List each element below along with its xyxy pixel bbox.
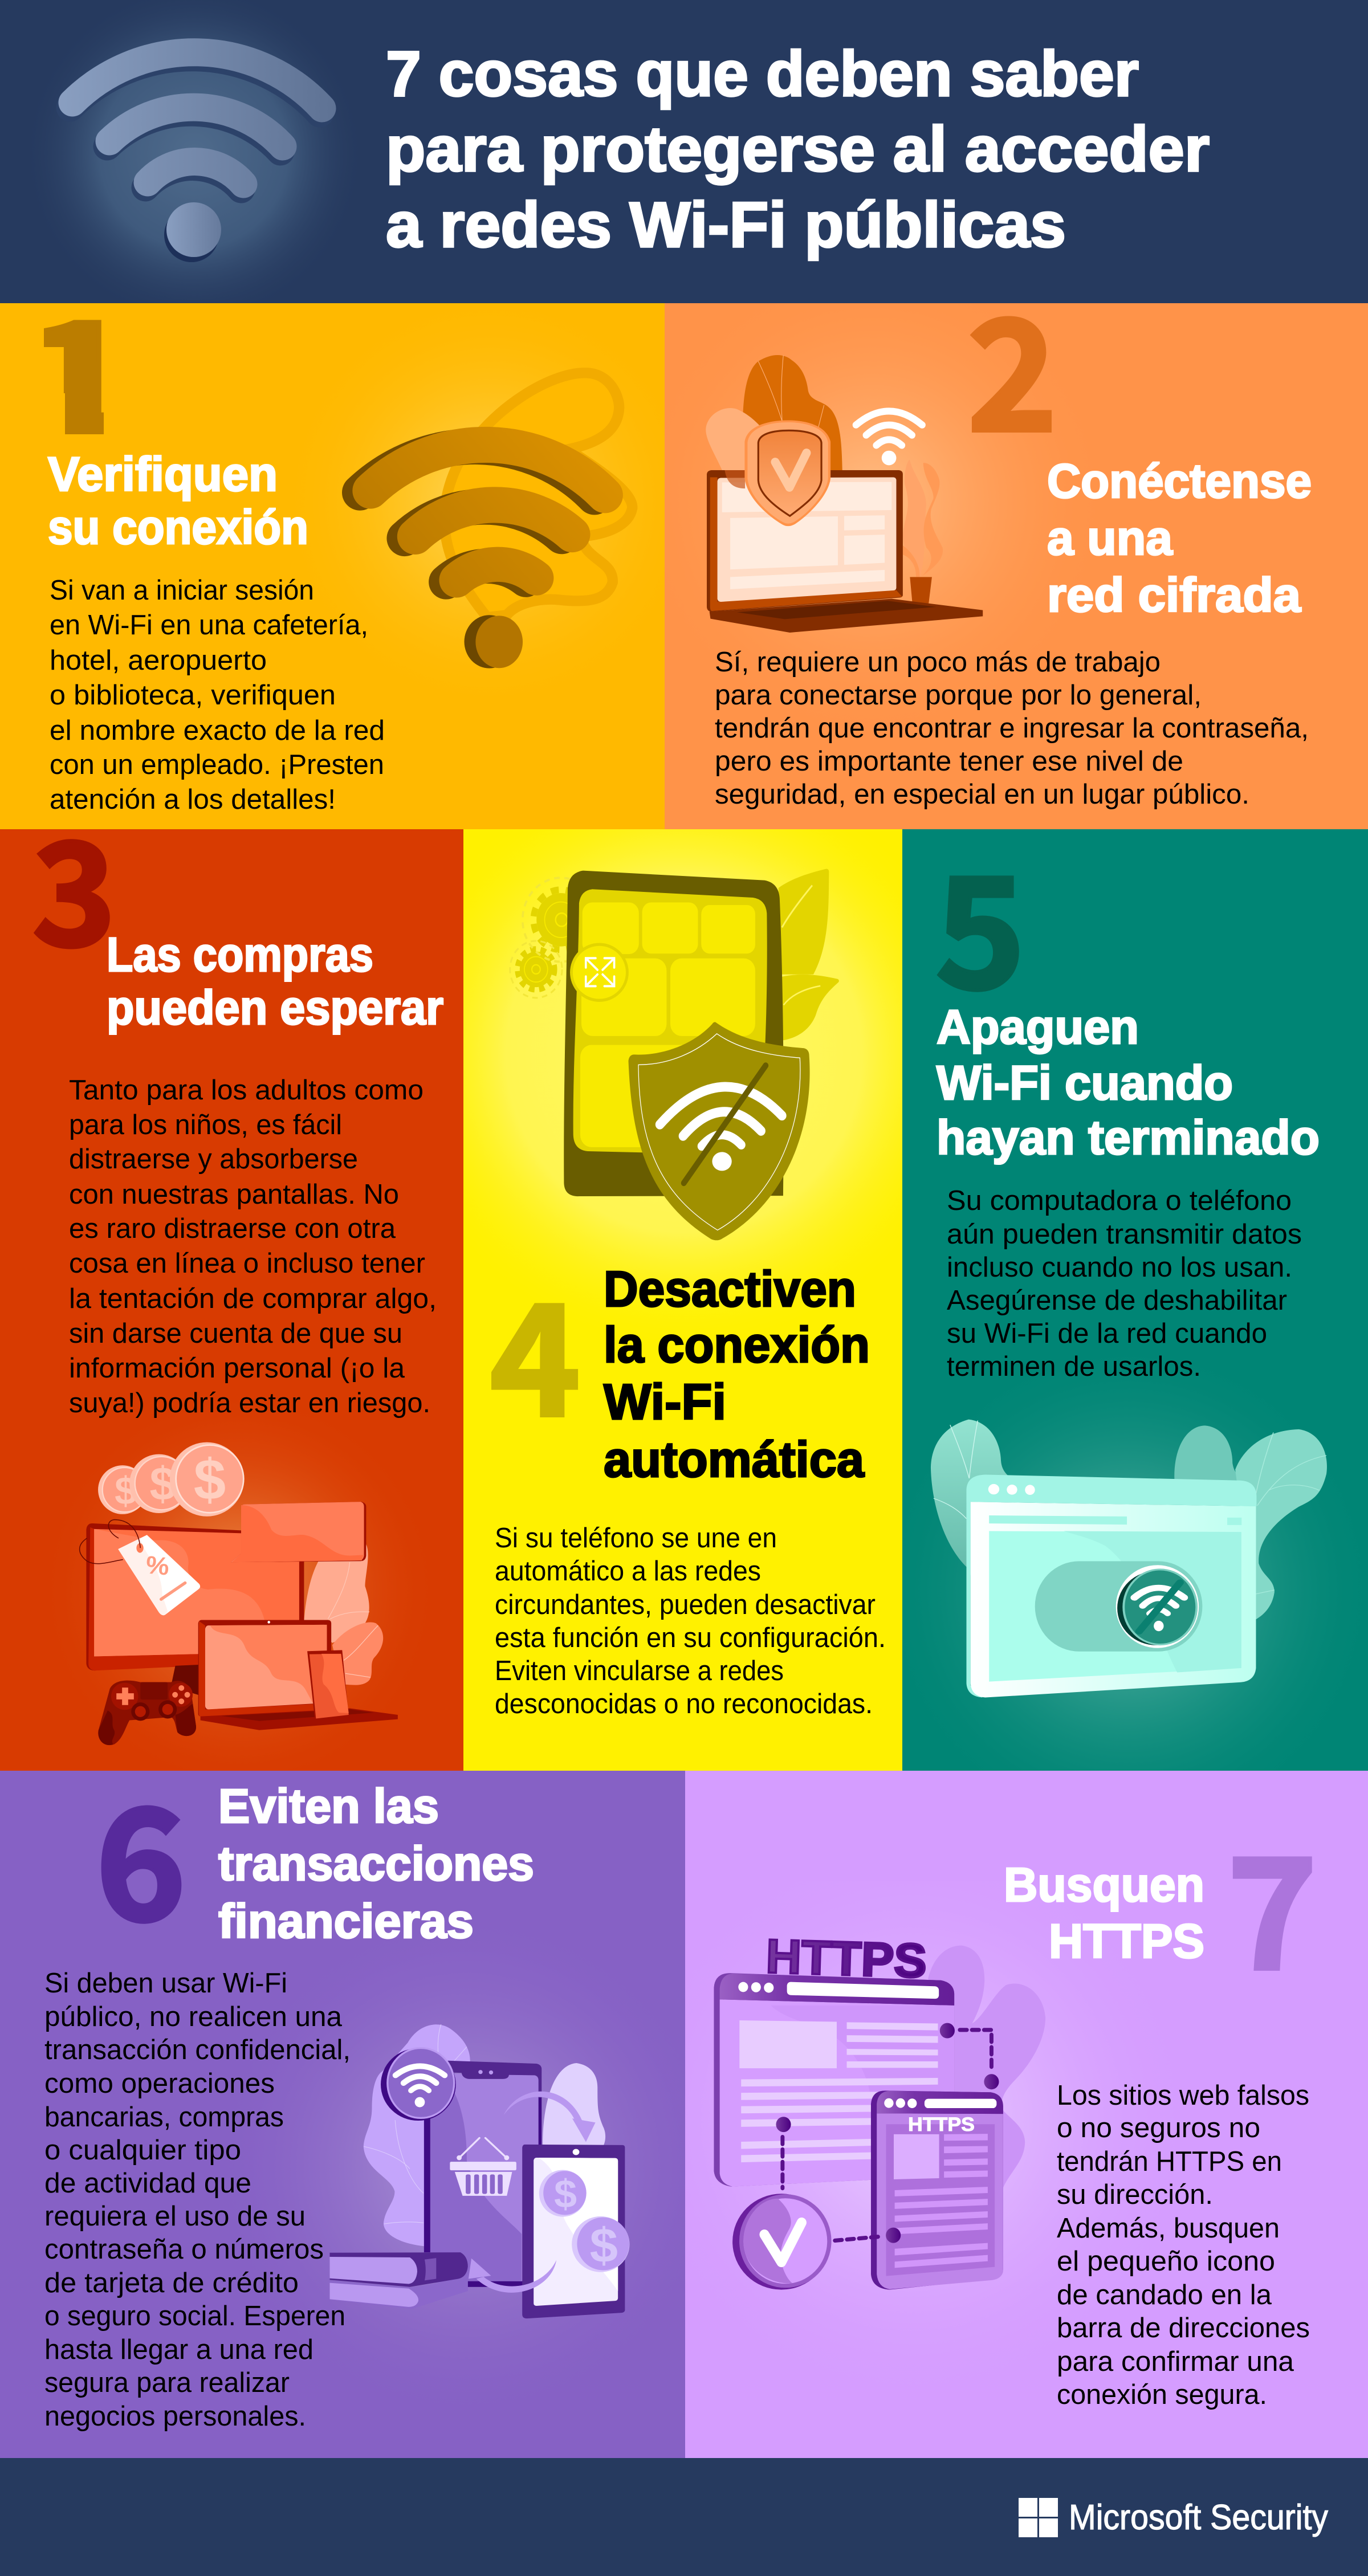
panel: 6 eviten las transacciones financieras — [0, 1742, 685, 2458]
heading 2: Conéctense — [1047, 454, 1312, 508]
panel: 4 desactiven la conexión wi-fi automática — [463, 829, 902, 1771]
body text 2: pero es importante tener ese nivel de — [715, 746, 1183, 777]
icon: game controller — [98, 1681, 196, 1745]
connector lines — [783, 2030, 991, 2240]
title: a redes Wi-Fi públicas — [386, 189, 1066, 260]
body text 3: distraerse y absorberse — [69, 1144, 358, 1175]
icon: wifi header — [70, 52, 322, 262]
number 7: 7 — [1227, 1791, 1318, 2013]
body text 3: sin darse cuenta de que su — [69, 1318, 402, 1349]
toggle switch — [1035, 1561, 1202, 1652]
body text 2: tendrán que encontrar e ingresar la contraseña, — [715, 713, 1309, 744]
icon: coins: $ — [554, 2173, 577, 2216]
body text 7: o no seguros no — [1057, 2113, 1260, 2143]
body text 6: Si deben usar Wi-Fi — [44, 1968, 287, 1999]
heading 2: a una — [1047, 511, 1173, 565]
heading 3: Las compras — [107, 928, 373, 981]
body text 2: Sí, requiere un poco más de trabajo — [715, 647, 1161, 678]
body text 4: Si su teléfono se une en — [495, 1523, 777, 1554]
body text 1: o biblioteca, verifiquen — [50, 680, 336, 711]
heading 1: su conexión — [48, 500, 308, 554]
number 2: 2 — [967, 252, 1058, 475]
body text 7: su dirección. — [1057, 2179, 1213, 2210]
body text 5: incluso cuando no los usan. — [947, 1252, 1292, 1283]
footer — [0, 2458, 1368, 2576]
icon: check badge — [732, 2194, 832, 2290]
icon: tablet — [307, 1650, 349, 1720]
body text 7: Además, busquen — [1057, 2213, 1280, 2244]
panel: 1 verifiquen su conexión — [0, 254, 665, 829]
body text 6: de tarjeta de crédito — [44, 2268, 299, 2298]
body text 2 — [715, 647, 1309, 810]
icon: small browser window — [871, 2090, 1003, 2290]
panel: header — [0, 0, 1368, 303]
icon: microsoft logo — [1019, 2498, 1058, 2537]
body text 1: en Wi-Fi en una cafetería, — [50, 610, 368, 641]
heading 4: Desactiven — [604, 1261, 856, 1317]
body text 4 — [495, 1523, 886, 1719]
heading 4: automática — [604, 1431, 865, 1487]
heading 6: financieras — [218, 1894, 474, 1948]
icon: coins: $ — [590, 2219, 618, 2273]
illustration: phone with shield — [510, 869, 839, 1240]
icon: shield with crossed wifi — [628, 1022, 810, 1240]
heading 7 — [1004, 1858, 1204, 1968]
heading 2: red cifrada — [1047, 568, 1301, 622]
body text 1: el nombre exacto de la red — [50, 715, 385, 746]
body text 2: seguridad, en especial en un lugar público. — [715, 779, 1249, 810]
title: para protegerse al acceder — [386, 113, 1210, 185]
icon: billboard panel — [231, 1502, 366, 1623]
body text 7: el pequeño icono — [1057, 2246, 1275, 2277]
body text 7: para confirmar una — [1057, 2346, 1294, 2377]
body text 6: o cualquier tipo — [44, 2135, 241, 2166]
icon: price tag: % — [145, 1550, 170, 1581]
body text 6: bancarias, compras — [44, 2102, 284, 2133]
number 3: 3 — [32, 780, 116, 987]
body text 1 — [50, 575, 385, 815]
number 6: 6 — [95, 1742, 186, 1964]
body text 7: tendrán HTTPS en — [1057, 2146, 1282, 2177]
heading 5: hayan terminado — [937, 1111, 1320, 1164]
body text 6: segura para realizar — [44, 2367, 290, 2398]
icon: shopping basket — [450, 2138, 516, 2196]
body text 7: barra de direcciones — [1057, 2313, 1310, 2343]
heading 4 — [604, 1261, 870, 1487]
body text 5: aún pueden transmitir datos — [947, 1219, 1302, 1250]
heading 2 — [1047, 454, 1312, 622]
heading 3: pueden esperar — [107, 981, 443, 1034]
number 5: 5 — [935, 810, 1026, 1033]
body text 6: como operaciones — [44, 2068, 275, 2099]
body text 6 — [44, 1968, 351, 2432]
body text 1: atención a los detalles! — [50, 784, 336, 815]
heading 4: la conexión — [604, 1316, 870, 1373]
icon: HTTPS big label: HTTPS — [765, 1929, 927, 1988]
heading 6: Eviten las — [218, 1779, 439, 1833]
body text 6: público, no realicen una — [44, 2002, 343, 2032]
heading 5 — [937, 1000, 1320, 1164]
body text 6: contraseña o números — [44, 2234, 324, 2265]
number 4: 4 — [490, 1237, 581, 1460]
body text 6: de actividad que — [44, 2168, 251, 2199]
icon: price tag — [80, 1519, 200, 1615]
body text 5: terminen de usarlos. — [947, 1351, 1201, 1382]
body text 3: Tanto para los adultos como — [69, 1075, 424, 1106]
body text 5 — [947, 1185, 1302, 1382]
heading 6 — [218, 1779, 534, 1948]
body text 5: Asegúrense de deshabilitar — [947, 1285, 1287, 1316]
heading 6: transacciones — [218, 1837, 534, 1890]
body text 7: Los sitios web falsos — [1057, 2080, 1309, 2111]
panel: 5 apaguen wi-fi — [902, 810, 1368, 1771]
body text 5: Su computadora o teléfono — [947, 1185, 1292, 1216]
body text 7: conexión segura. — [1057, 2379, 1267, 2410]
body text 4: circundantes, pueden desactivar — [495, 1589, 876, 1620]
heading 7: Busquen — [1004, 1858, 1204, 1911]
heading 3 — [107, 928, 443, 1034]
heading 1: Verifiquen — [48, 447, 278, 501]
title — [386, 38, 1210, 260]
icon: coins — [98, 1442, 244, 1517]
icon: shield with check — [744, 420, 830, 526]
body text 3: para los niños, es fácil — [69, 1110, 342, 1140]
brand name: Microsoft Security — [1069, 2498, 1328, 2537]
panel: 7 busquen https — [685, 1771, 1368, 2458]
icon: wifi coin — [381, 2048, 456, 2121]
icon: coins — [539, 2170, 629, 2273]
body text 6: negocios personales. — [44, 2401, 306, 2432]
icon: coins: $ — [194, 1448, 226, 1512]
icon: curved arrows — [469, 2092, 596, 2293]
icon: expand button — [571, 944, 627, 1000]
body text 1: con un empleado. ¡Presten — [50, 749, 384, 780]
heading 1 — [48, 447, 308, 554]
icon: HTTPS small label: HTTPS — [908, 2114, 975, 2135]
body text 4: esta función en su configuración. — [495, 1623, 886, 1653]
icon: books — [329, 2252, 468, 2309]
icon: laptop — [198, 1620, 398, 1730]
icon: wifi with leaf — [360, 373, 632, 669]
illustration: laptop with shield — [706, 355, 983, 633]
body text 6: hasta llegar a una red — [44, 2334, 314, 2365]
illustration: browser windows https — [714, 1946, 1045, 2290]
icon: coins: $ — [115, 1469, 136, 1513]
body text 3: con nuestras pantallas. No — [69, 1179, 399, 1210]
body text 4: automático a las redes — [495, 1556, 761, 1587]
body text 3 — [69, 1075, 437, 1419]
title: 7 cosas que deben saber — [386, 38, 1139, 109]
body text 6: transacción confidencial, — [44, 2035, 351, 2065]
body text 3: suya!) podría estar en riesgo. — [69, 1388, 430, 1419]
body text 3: la tentación de comprar algo, — [69, 1283, 437, 1314]
illustration: devices and coins — [80, 1442, 398, 1745]
body text 5: su Wi-Fi de la red cuando — [947, 1318, 1267, 1349]
body text 1: hotel, aeropuerto — [50, 645, 267, 676]
illustration: browser with wifi toggle — [931, 1420, 1327, 1698]
heading 4: Wi-Fi — [604, 1373, 726, 1430]
body text 4: Eviten vincularse a redes — [495, 1656, 784, 1686]
illustration: phone, basket, tablet, coins — [329, 2024, 629, 2318]
body text 6: o seguro social. Esperen — [44, 2301, 345, 2332]
body text 3: información personal (¡o la — [69, 1353, 405, 1384]
heading 5: Apaguen — [937, 1000, 1139, 1054]
body text 6: requiera el uso de su — [44, 2201, 306, 2232]
heading 7: HTTPS — [1049, 1914, 1204, 1968]
body text 3: es raro distraerse con otra — [69, 1213, 396, 1244]
icon: coins: $ — [149, 1458, 176, 1510]
number 1: 1 — [13, 254, 144, 477]
body text 3: cosa en línea o incluso tener — [69, 1248, 425, 1279]
icon: wifi white — [856, 411, 922, 465]
body text 7: de candado en la — [1057, 2280, 1272, 2310]
icon: tablet — [522, 2145, 625, 2318]
body text 1: Si van a iniciar sesión — [50, 575, 314, 606]
panel: 3 las compras pueden esperar — [0, 780, 463, 1771]
body text 4: desconocidas o no reconocidas. — [495, 1689, 873, 1719]
panel: 2 conéctense a una red cifrada — [665, 252, 1368, 829]
heading 5: Wi-Fi cuando — [937, 1056, 1233, 1110]
body text 7 — [1057, 2080, 1310, 2410]
body text 2: para conectarse porque por lo general, — [715, 680, 1202, 711]
